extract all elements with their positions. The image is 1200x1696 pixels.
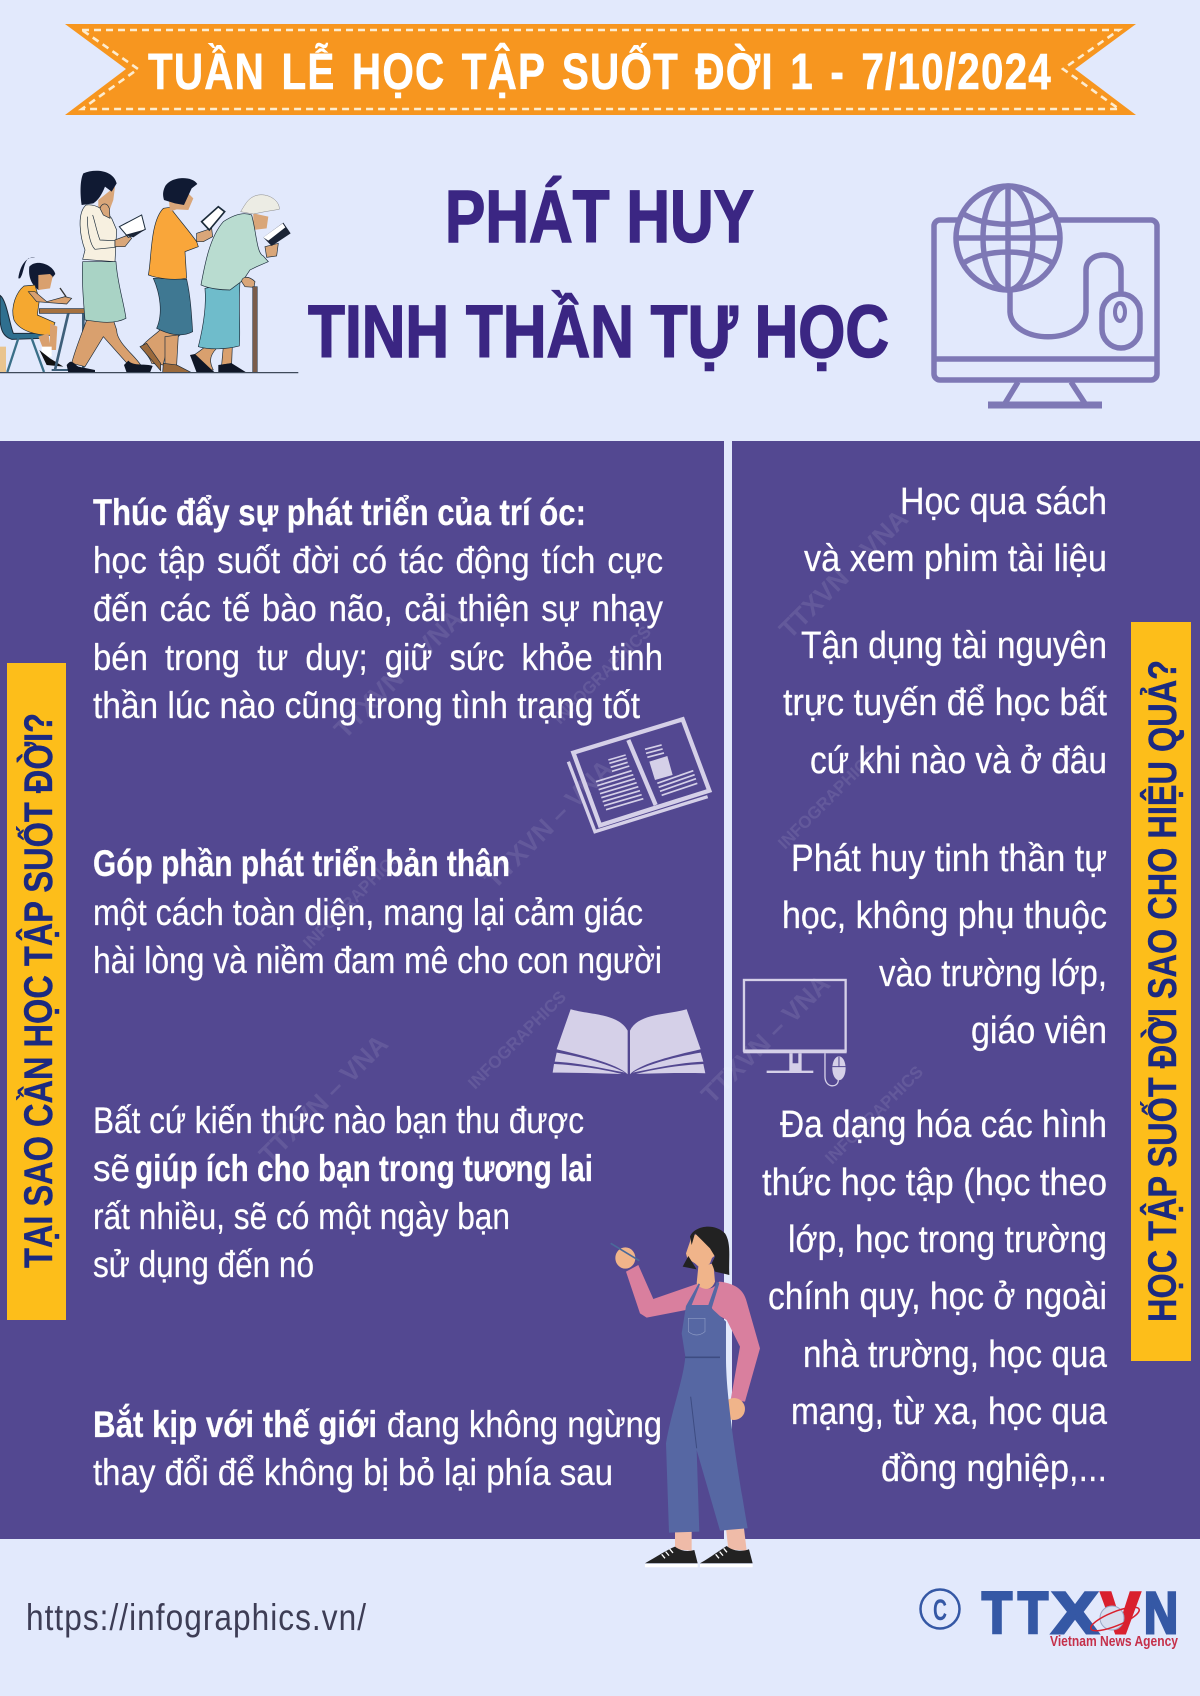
text block: brain development	[93, 492, 663, 726]
text block: brain development: đến các tế bào não, cải thiện sự nhạy	[93, 588, 663, 629]
text block: knowledge useful later: sử dụng đến nó	[93, 1244, 314, 1285]
text block: keep up with the world: đang không ngừng	[387, 1404, 662, 1445]
main title	[308, 175, 889, 373]
watermarks: TTXVN – VNA	[478, 753, 619, 894]
copyright symbol: C	[933, 1594, 947, 1627]
text block: knowledge useful later: sẽ	[93, 1148, 130, 1189]
left side tab	[7, 663, 66, 1320]
right text: diversify forms	[762, 1104, 1108, 1490]
logo: TTXVN: V	[1101, 1581, 1140, 1646]
logo: TTXVN: X	[1052, 1581, 1098, 1646]
skin: neck and face	[697, 1263, 715, 1289]
watermarks: INFOGRAPHICS	[299, 847, 405, 953]
icon: small computer	[743, 980, 847, 1086]
text block: knowledge useful later: rất nhiều, sẽ có một ngày bạn	[93, 1196, 510, 1237]
shins	[675, 1528, 747, 1551]
right text: online resources	[783, 625, 1107, 782]
text block: knowledge useful later: giúp ích cho bạn trong tương lai	[135, 1148, 593, 1189]
text block: keep up with the world	[93, 1403, 662, 1493]
right text: online resources: Tận dụng tài nguyên	[801, 625, 1107, 667]
right text: diversify forms: mạng, từ xa, học qua	[791, 1391, 1108, 1433]
website url: https://infographics.vn/	[26, 1597, 367, 1638]
text block: keep up with the world: thay đổi để không bị bỏ lại phía sau	[93, 1452, 613, 1493]
main title: PHÁT HUY	[445, 175, 754, 258]
logo: TTXVN	[982, 1581, 1178, 1650]
shoes	[645, 1546, 753, 1563]
copyright symbol	[920, 1590, 960, 1628]
right text: online resources: cứ khi nào và ở đâu	[810, 740, 1107, 782]
text block: personal development: một cách toàn diện, mang lại cảm giác	[93, 892, 643, 933]
main title: TINH THẦN TỰ HỌC	[308, 290, 889, 373]
panel: content background	[0, 441, 1200, 1539]
illustration: teacher woman	[611, 1227, 760, 1567]
text block: brain development: học tập suốt đời có tác động tích cực	[93, 540, 663, 581]
watermarks: TTXVN – VNA	[328, 603, 469, 744]
right text: books and documentaries: và xem phim tài liệu	[804, 538, 1107, 580]
watermarks	[253, 503, 927, 1169]
illustration: generations reading	[0, 171, 298, 373]
right text: self-study spirit: vào trường lớp,	[879, 953, 1107, 995]
watermarks: INFOGRAPHICS	[821, 1062, 927, 1168]
young woman	[67, 171, 153, 373]
right text: books and documentaries: Học qua sách	[900, 481, 1107, 523]
right text: self-study spirit: học, không phụ thuộc	[782, 895, 1107, 937]
watermarks: INFOGRAPHICS	[774, 747, 880, 853]
watermarks: TTXVN – VNA	[695, 968, 836, 1109]
logo: TTXVN: T	[1018, 1581, 1048, 1646]
overalls	[666, 1282, 748, 1533]
watermarks: INFOGRAPHICS	[464, 987, 570, 1093]
icon: open book	[553, 1009, 705, 1074]
right text: self-study spirit: giáo viên	[971, 1010, 1107, 1052]
text block: brain development: Thúc đẩy sự phát triển của trí óc:	[93, 492, 586, 533]
text block: personal development	[93, 843, 662, 981]
text block: personal development: Góp phần phát triển bản thân	[93, 843, 510, 884]
right text: books and documentaries	[804, 481, 1107, 580]
right text: diversify forms: đồng nghiệp,...	[881, 1448, 1107, 1490]
middle-aged woman	[140, 178, 225, 373]
text block: brain development: bén trong tư duy; giữ sức khỏe tinh	[93, 637, 663, 678]
icon: open newspaper	[568, 719, 709, 832]
hair	[683, 1227, 729, 1275]
kid at desk	[0, 257, 91, 372]
right side tab	[1131, 622, 1191, 1361]
watermarks: TTXVN – VNA	[773, 503, 914, 644]
left tab heading: TẠI SAO CẦN HỌC TẬP SUỐT ĐỜI?	[15, 713, 61, 1268]
banner	[65, 24, 1136, 115]
right tab heading: HỌC TẬP SUỐT ĐỜI SAO CHO HIỆU QUẢ?	[1139, 660, 1185, 1322]
text block: brain development: thần lúc nào cũng trong tình trạng tốt	[93, 685, 641, 726]
logo: TTXVN: N	[1144, 1581, 1178, 1646]
icon: monitor with globe and mouse	[934, 186, 1157, 405]
elderly woman	[190, 195, 291, 373]
right text: diversify forms: lớp, học trong trường	[788, 1219, 1107, 1261]
text block: keep up with the world: Bắt kịp với thế giới	[93, 1403, 377, 1445]
right text: self-study spirit	[782, 838, 1107, 1052]
logo: TTXVN: Vietnam News Agency	[1050, 1634, 1178, 1650]
pencil	[611, 1243, 639, 1261]
pink sweater and arms	[626, 1265, 760, 1402]
right text: self-study spirit: Phát huy tinh thần tự	[791, 838, 1107, 880]
text block: personal development: hài lòng và niềm đam mê cho con người	[93, 940, 662, 981]
right text: diversify forms: chính quy, học ở ngoài	[768, 1276, 1107, 1318]
hands	[723, 1398, 745, 1420]
right text: diversify forms: nhà trường, học qua	[803, 1334, 1108, 1376]
right text: online resources: trực tuyến để học bất	[783, 682, 1107, 724]
watermarks: TTXVN – VNA	[253, 1028, 394, 1169]
logo: TTXVN: T	[982, 1581, 1012, 1646]
text block: knowledge useful later	[93, 1100, 593, 1285]
right text: diversify forms: thức học tập (học theo	[762, 1162, 1107, 1204]
watermarks: INFOGRAPHICS	[549, 622, 655, 728]
text block: knowledge useful later: Bất cứ kiến thức nào bạn thu được	[93, 1100, 584, 1141]
right text: diversify forms: Đa dạng hóa các hình	[780, 1104, 1107, 1146]
